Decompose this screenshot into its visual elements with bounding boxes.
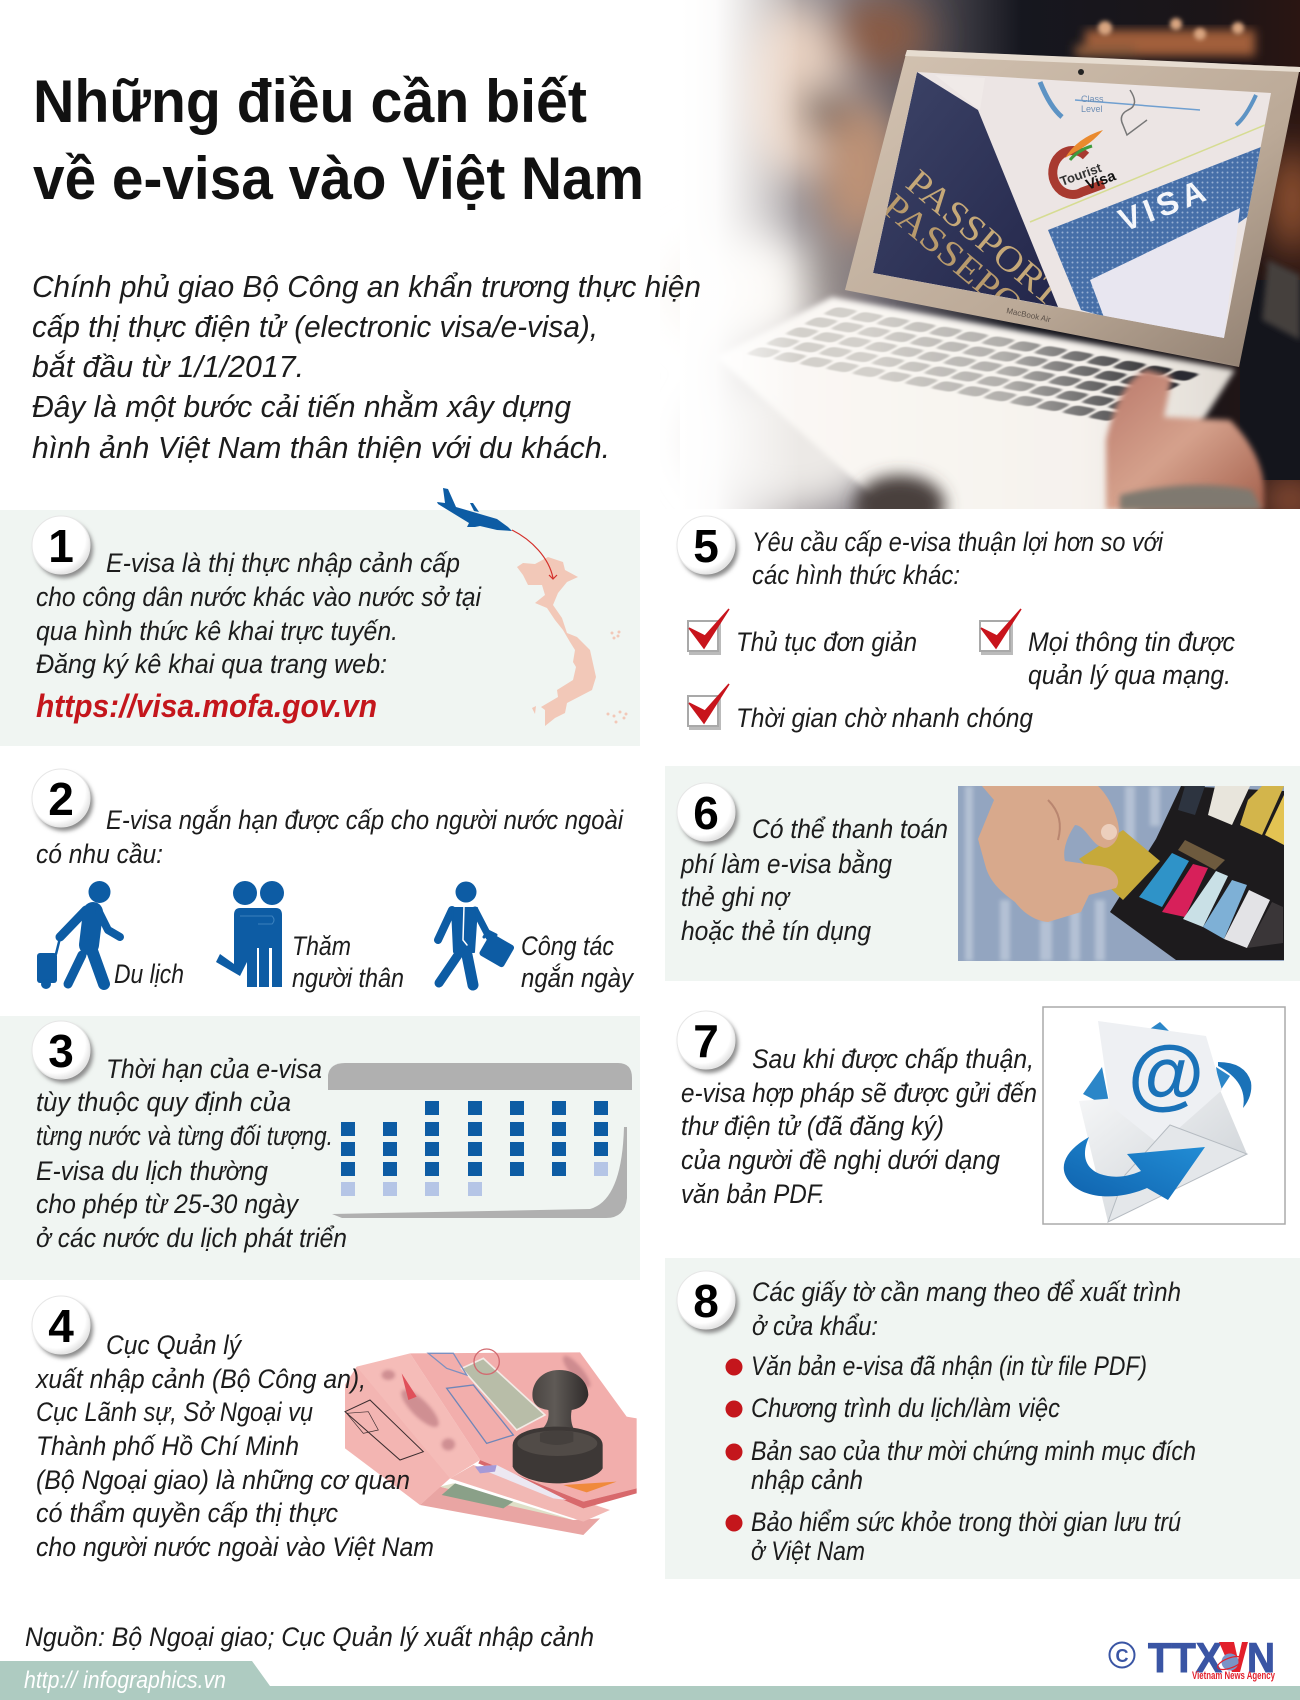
hero photo: laptop with passport and visa: Tourist bbox=[1058, 160, 1104, 189]
logo: TTXVN Vietnam News Agency: N bbox=[1247, 1634, 1275, 1681]
icon: traveller with suitcase bbox=[37, 881, 120, 989]
intro text: Chính phủ giao Bộ Công an khẩn trương thực hiện bbox=[32, 269, 701, 304]
panel 6: payment bbox=[665, 766, 1300, 981]
bullet list: Bảo hiểm sức khỏe trong thời gian lưu trú bbox=[751, 1507, 1181, 1537]
text block 4: cho người nước ngoài vào Việt Nam bbox=[36, 1532, 434, 1562]
text block 1: qua hình thức kê khai trực tuyến. bbox=[36, 616, 398, 646]
text block 1 bbox=[36, 548, 482, 679]
hero photo: laptop with passport and visa: Visa bbox=[1084, 167, 1119, 194]
text block 4: Thành phố Hồ Chí Minh bbox=[36, 1431, 299, 1461]
intro text bbox=[32, 269, 701, 465]
text block 4: xuất nhập cảnh (Bộ Công an), bbox=[34, 1364, 366, 1394]
title bbox=[33, 68, 644, 212]
badge 7: 7 bbox=[693, 1015, 719, 1067]
map of Vietnam bbox=[517, 557, 628, 726]
label: short business trip: Công tác bbox=[521, 931, 614, 961]
text block 1: Đăng ký kê khai qua trang web: bbox=[36, 649, 387, 679]
source line: Nguồn: Bộ Ngoại giao; Cục Quản lý xuất nhập cảnh bbox=[25, 1622, 594, 1652]
text block 7 bbox=[681, 1044, 1037, 1209]
badge 6: 6 bbox=[693, 787, 719, 839]
hero photo: laptop with passport and visa: MacBook Air bbox=[1006, 306, 1052, 324]
panel 7: delivery by email bbox=[677, 1007, 1285, 1224]
bullet list: nhập cảnh bbox=[751, 1465, 863, 1495]
label: short business trip bbox=[521, 931, 634, 993]
text block 3: E-visa du lịch thường bbox=[36, 1156, 268, 1186]
badge 2: 2 bbox=[48, 773, 74, 825]
title: về e-visa vào Việt Nam bbox=[33, 145, 644, 212]
icon: checkbox 3 bbox=[688, 684, 729, 730]
text block 3: Thời hạn của e-visa bbox=[106, 1054, 322, 1084]
text block 7: văn bản PDF. bbox=[681, 1179, 825, 1209]
badge 3 bbox=[32, 1021, 93, 1083]
photo: credit cards in wallet bbox=[958, 786, 1284, 961]
text block 1: E-visa là thị thực nhập cảnh cấp bbox=[106, 548, 460, 578]
badge 7 bbox=[677, 1011, 738, 1073]
text block 2: E-visa ngắn hạn được cấp cho người nước ngoài bbox=[106, 804, 624, 835]
badge 1: 1 bbox=[48, 520, 74, 572]
icon: checkbox 1 bbox=[688, 609, 729, 655]
logo: TTXVN Vietnam News Agency: C bbox=[1116, 1646, 1128, 1666]
badge 6 bbox=[677, 783, 738, 845]
text block 7: của người đề nghị dưới dạng bbox=[681, 1145, 1000, 1175]
url: https://visa.mofa.gov.vn bbox=[36, 688, 377, 724]
text block 4: có thẩm quyền cấp thị thực bbox=[36, 1498, 338, 1528]
footer band: http:// infographics.vn bbox=[24, 1667, 226, 1694]
hero photo: laptop with passport and visa: Level bbox=[1081, 104, 1103, 114]
bullet list: Văn bản e-visa đã nhận (in từ file PDF) bbox=[751, 1351, 1147, 1381]
text block 3: từng nước và từng đối tượng. bbox=[36, 1121, 333, 1151]
icon: business traveller bbox=[438, 882, 515, 985]
text block 5 bbox=[752, 527, 1164, 590]
title: Những điều cần biết bbox=[33, 68, 587, 135]
badge 8: 8 bbox=[693, 1275, 719, 1327]
panel 2: short-term e-visa bbox=[32, 769, 634, 993]
badge 3: 3 bbox=[48, 1025, 74, 1077]
text block 8 bbox=[752, 1277, 1181, 1341]
panel 1: e-visa definition bbox=[0, 488, 640, 746]
bullet list bbox=[726, 1351, 1196, 1566]
text block 6: thẻ ghi nợ bbox=[681, 882, 791, 912]
text block 6: phí làm e-visa bằng bbox=[680, 848, 892, 879]
hero photo: laptop with passport and visa bbox=[665, 0, 1300, 535]
badge 2 bbox=[32, 769, 93, 831]
icon: two people hugging bbox=[216, 881, 284, 987]
icon: airplane bbox=[437, 488, 512, 531]
icon: checkbox 2 bbox=[980, 609, 1021, 655]
label: tourism: Du lịch bbox=[114, 959, 184, 989]
text block 1: cho công dân nước khác vào nước sở tại bbox=[36, 582, 482, 612]
text block 2: có nhu cầu: bbox=[36, 839, 163, 869]
label: managed online: quản lý qua mạng. bbox=[1028, 660, 1231, 690]
text block 4: Cục Quản lý bbox=[106, 1330, 242, 1360]
text block 4: (Bộ Ngoại giao) là những cơ quan bbox=[36, 1465, 410, 1495]
label: quick waiting time: Thời gian chờ nhanh chóng bbox=[736, 703, 1033, 733]
panel 8: required documents bbox=[665, 1258, 1300, 1579]
intro text: cấp thị thực điện tử (electronic visa/e-visa), bbox=[32, 309, 598, 344]
intro text: hình ảnh Việt Nam thân thiện với du khách. bbox=[32, 430, 610, 465]
text block 3: tùy thuộc quy định của bbox=[36, 1087, 291, 1117]
intro text: bắt đầu từ 1/1/2017. bbox=[32, 349, 304, 384]
text block 8: ở cửa khẩu: bbox=[752, 1311, 878, 1341]
icon: email envelope bbox=[1043, 1007, 1285, 1224]
badge 5: 5 bbox=[693, 520, 719, 572]
intro text: Đây là một bước cải tiến nhằm xây dựng bbox=[32, 389, 571, 424]
label: visiting relatives bbox=[292, 931, 404, 993]
bullet list: ở Việt Nam bbox=[751, 1536, 865, 1566]
badge 1 bbox=[32, 516, 93, 578]
text block 7: thư điện tử (đã đăng ký) bbox=[681, 1111, 944, 1141]
text block 5: Yêu cầu cấp e-visa thuận lợi hơn so với bbox=[752, 527, 1164, 557]
badge 4 bbox=[32, 1296, 93, 1358]
label: managed online: Mọi thông tin được bbox=[1028, 627, 1235, 657]
text block 3: cho phép từ 25-30 ngày bbox=[36, 1189, 299, 1219]
label: visiting relatives: Thăm bbox=[292, 931, 351, 961]
logo: TTXVN Vietnam News Agency bbox=[1110, 1634, 1276, 1682]
icon: email envelope: @ bbox=[1128, 1029, 1204, 1117]
hero photo: laptop with passport and visa: PASSEPORT bbox=[875, 185, 1069, 358]
bullet list: Chương trình du lịch/làm việc bbox=[751, 1393, 1060, 1423]
text block 4 bbox=[34, 1330, 434, 1562]
text block 6 bbox=[680, 814, 948, 946]
footer band bbox=[0, 1661, 1300, 1700]
panel 5: advantages bbox=[677, 516, 1235, 733]
hero photo: laptop with passport and visa: PASSPORT bbox=[899, 161, 1070, 314]
text block 8: Các giấy tờ cần mang theo để xuất trình bbox=[752, 1277, 1181, 1307]
badge 8 bbox=[677, 1271, 738, 1333]
bullet list: Bản sao của thư mời chứng minh mục đích bbox=[751, 1436, 1196, 1466]
text block 7: e-visa hợp pháp sẽ được gửi đến bbox=[681, 1078, 1037, 1108]
hero photo: laptop with passport and visa: VISA bbox=[1114, 171, 1215, 239]
text block 3: ở các nước du lịch phát triển bbox=[36, 1223, 347, 1253]
badge 5 bbox=[677, 516, 738, 578]
text block 2 bbox=[36, 804, 624, 869]
panel 4: issuing authorities bbox=[32, 1296, 637, 1562]
logo: TTXVN Vietnam News Agency: TTX bbox=[1148, 1634, 1222, 1681]
icon: calendar bbox=[328, 1063, 632, 1218]
label: simple procedure: Thủ tục đơn giản bbox=[736, 627, 917, 657]
text block 7: Sau khi được chấp thuận, bbox=[752, 1044, 1034, 1074]
hero photo: laptop with passport and visa: Class bbox=[1081, 94, 1104, 104]
label: visiting relatives: người thân bbox=[292, 963, 404, 993]
panel 3: e-visa duration bbox=[0, 1016, 640, 1280]
text block 3 bbox=[36, 1054, 347, 1253]
badge 4: 4 bbox=[48, 1300, 74, 1352]
text block 4: Cục Lãnh sự, Sở Ngoại vụ bbox=[36, 1397, 313, 1427]
label: short business trip: ngắn ngày bbox=[521, 962, 634, 993]
flight path arrow bbox=[512, 530, 557, 579]
photo: stamp on passports bbox=[345, 1349, 637, 1535]
text block 5: các hình thức khác: bbox=[752, 560, 960, 590]
text block 6: Có thể thanh toán bbox=[752, 814, 948, 844]
text block 6: hoặc thẻ tín dụng bbox=[681, 916, 871, 946]
label: managed online bbox=[1028, 627, 1235, 690]
